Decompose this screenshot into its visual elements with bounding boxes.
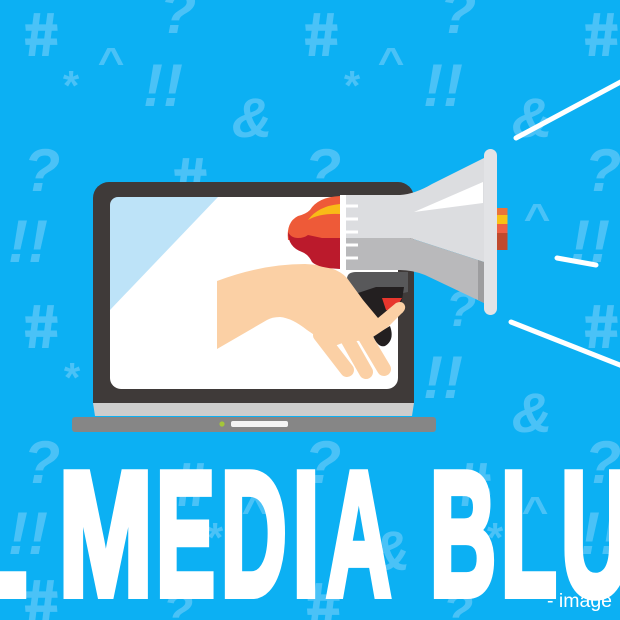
cap yellow — [497, 215, 508, 224]
background symbols pattern: ^ — [524, 196, 550, 240]
background symbols pattern: # — [582, 1, 620, 68]
background symbols pattern: # — [172, 451, 211, 518]
rear cap yellow highlight — [308, 204, 340, 220]
background symbols pattern: # — [302, 1, 341, 68]
background symbols pattern: & — [232, 86, 272, 149]
rear cap red bottom — [288, 232, 340, 269]
title — [0, 435, 620, 620]
rear cap orange top — [288, 196, 340, 240]
background symbols pattern: * — [487, 514, 504, 561]
background symbols pattern: !! — [580, 500, 620, 567]
horn rim — [484, 149, 497, 315]
background symbols pattern: ^ — [98, 40, 124, 84]
background symbols pattern: ^ — [378, 40, 404, 84]
background symbols pattern: # — [171, 146, 210, 213]
body — [346, 158, 484, 262]
background symbols pattern: * — [63, 62, 80, 109]
background symbols pattern: * — [64, 354, 81, 401]
sound rays — [511, 77, 620, 369]
rear cap — [288, 196, 340, 269]
background symbols pattern: !! — [8, 500, 48, 567]
background symbols pattern: ^ — [242, 489, 268, 533]
laptop base — [72, 417, 436, 432]
background symbols pattern: !! — [423, 344, 463, 411]
megaphone — [288, 149, 508, 315]
background symbols pattern: & — [370, 519, 410, 582]
background symbols pattern: # — [22, 293, 61, 360]
megaphone handle — [347, 272, 408, 346]
power light — [219, 421, 225, 427]
palm and thumb — [217, 264, 405, 349]
white collar — [340, 195, 347, 270]
background symbols pattern: ? — [446, 281, 476, 337]
cap orange — [497, 208, 508, 215]
cap coral — [497, 224, 508, 233]
trackpad slot — [231, 421, 288, 427]
scale ticks — [346, 206, 358, 258]
rim shade — [478, 260, 484, 303]
background symbols pattern: !! — [423, 52, 463, 119]
background symbols pattern: ? — [24, 137, 60, 204]
laptop — [72, 182, 436, 432]
background symbols pattern: !! — [8, 208, 48, 275]
background symbols pattern: ? — [305, 429, 341, 496]
background symbols pattern: !! — [143, 52, 183, 119]
handle grip — [347, 272, 408, 300]
screen glare — [110, 197, 218, 310]
laptop screen — [110, 197, 398, 389]
laptop hinge — [93, 403, 414, 416]
background symbols pattern: * — [344, 62, 361, 109]
background symbols pattern: * — [207, 514, 224, 561]
hand — [217, 264, 405, 372]
background symbols pattern: ? — [24, 429, 60, 496]
laptop lid — [93, 182, 414, 403]
trigger — [382, 298, 402, 312]
background symbols pattern: # — [22, 1, 61, 68]
image caption: - image — [547, 590, 612, 612]
background symbols pattern: # — [455, 451, 494, 518]
horn highlight — [414, 182, 483, 212]
handle dark front — [358, 287, 404, 322]
fingers — [320, 332, 384, 372]
background symbols pattern: !! — [570, 208, 610, 275]
background symbols pattern: ? — [305, 137, 341, 204]
body shade — [346, 238, 484, 303]
front cap — [497, 208, 508, 250]
background symbols pattern: & — [512, 381, 552, 444]
handle knob — [373, 326, 392, 346]
background symbols pattern: ^ — [522, 489, 548, 533]
cap brown — [497, 233, 508, 250]
background symbols pattern: # — [582, 293, 620, 360]
background symbols pattern: & — [512, 86, 552, 149]
